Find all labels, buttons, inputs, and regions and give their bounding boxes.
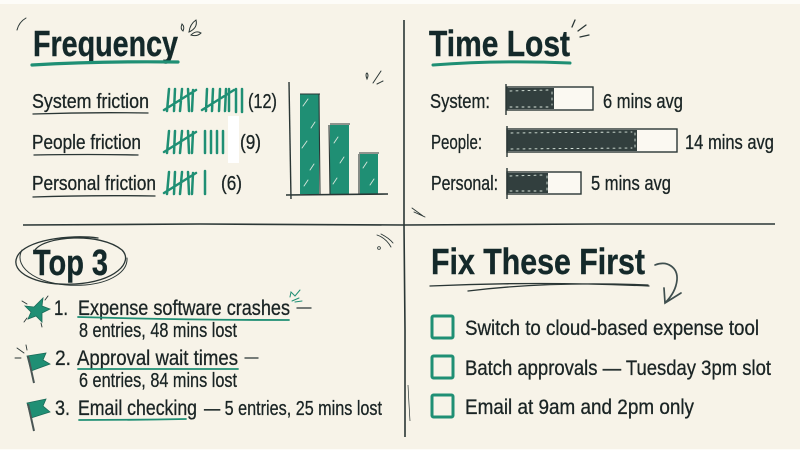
row: people friction bbox=[32, 116, 261, 163]
checklist item 3: Email at 9am and 2pm only bbox=[465, 396, 694, 419]
arrow bbox=[655, 263, 681, 303]
row: people time bbox=[431, 126, 774, 157]
doodle marks bbox=[377, 234, 393, 247]
heading underline bbox=[433, 62, 570, 65]
row: personal friction: (6) bbox=[221, 173, 242, 195]
item 1: 1. bbox=[54, 297, 68, 320]
panel: top 3 bbox=[15, 234, 393, 431]
heading: Time Lost: Time Lost bbox=[429, 23, 570, 64]
icon: flag bbox=[15, 345, 50, 383]
panel: frequency bbox=[17, 18, 388, 199]
doodle marks bbox=[572, 20, 589, 37]
row: personal friction: Personal friction bbox=[32, 173, 156, 195]
row: people time: People: bbox=[431, 132, 482, 154]
row: system friction: (12) bbox=[248, 91, 277, 113]
row: personal time: 5 mins avg bbox=[591, 173, 671, 195]
row: system time: 6 mins avg bbox=[603, 91, 683, 113]
item 2: 6 entries, 84 mins lost bbox=[79, 370, 237, 392]
item 3: Email checking bbox=[78, 397, 197, 420]
icon: star bbox=[22, 296, 50, 327]
row: system friction bbox=[32, 89, 277, 114]
item 1: Expense software crashes bbox=[78, 297, 290, 320]
panel: fix these first bbox=[430, 241, 771, 419]
heading: Fix These First: Fix These First bbox=[431, 241, 645, 282]
row: personal time: Personal: bbox=[431, 173, 498, 195]
item 1 bbox=[22, 290, 311, 342]
item 2 bbox=[15, 345, 258, 392]
item 3: — 5 entries, 25 mins lost bbox=[204, 398, 382, 420]
heading underline bbox=[430, 284, 649, 291]
row: people time: 14 mins avg bbox=[685, 132, 774, 154]
panel: time lost bbox=[412, 20, 774, 217]
row: personal friction bbox=[32, 171, 242, 197]
row: system time bbox=[430, 84, 683, 115]
bar chart bbox=[286, 71, 388, 199]
item 1: 8 entries, 48 mins lost bbox=[79, 320, 237, 342]
heading: Top 3 with circled outline: Top 3 bbox=[33, 242, 108, 283]
item 2: Approval wait times bbox=[77, 347, 238, 370]
item 3: 3. bbox=[55, 397, 70, 420]
row: people friction: (9) bbox=[240, 132, 261, 154]
icon: flag bbox=[27, 399, 50, 431]
row: personal time bbox=[431, 168, 671, 199]
heading underline bbox=[32, 62, 178, 65]
row: people friction: People friction bbox=[32, 132, 141, 154]
item 2: 2. bbox=[55, 347, 71, 370]
row: system friction: System friction bbox=[32, 91, 149, 113]
item 3 bbox=[27, 397, 382, 431]
heading: Frequency: Frequency bbox=[33, 23, 178, 64]
row: system time: System: bbox=[430, 91, 490, 113]
doodle marks bbox=[17, 18, 201, 36]
checklist item 1: Switch to cloud-based expense tool bbox=[465, 317, 759, 340]
